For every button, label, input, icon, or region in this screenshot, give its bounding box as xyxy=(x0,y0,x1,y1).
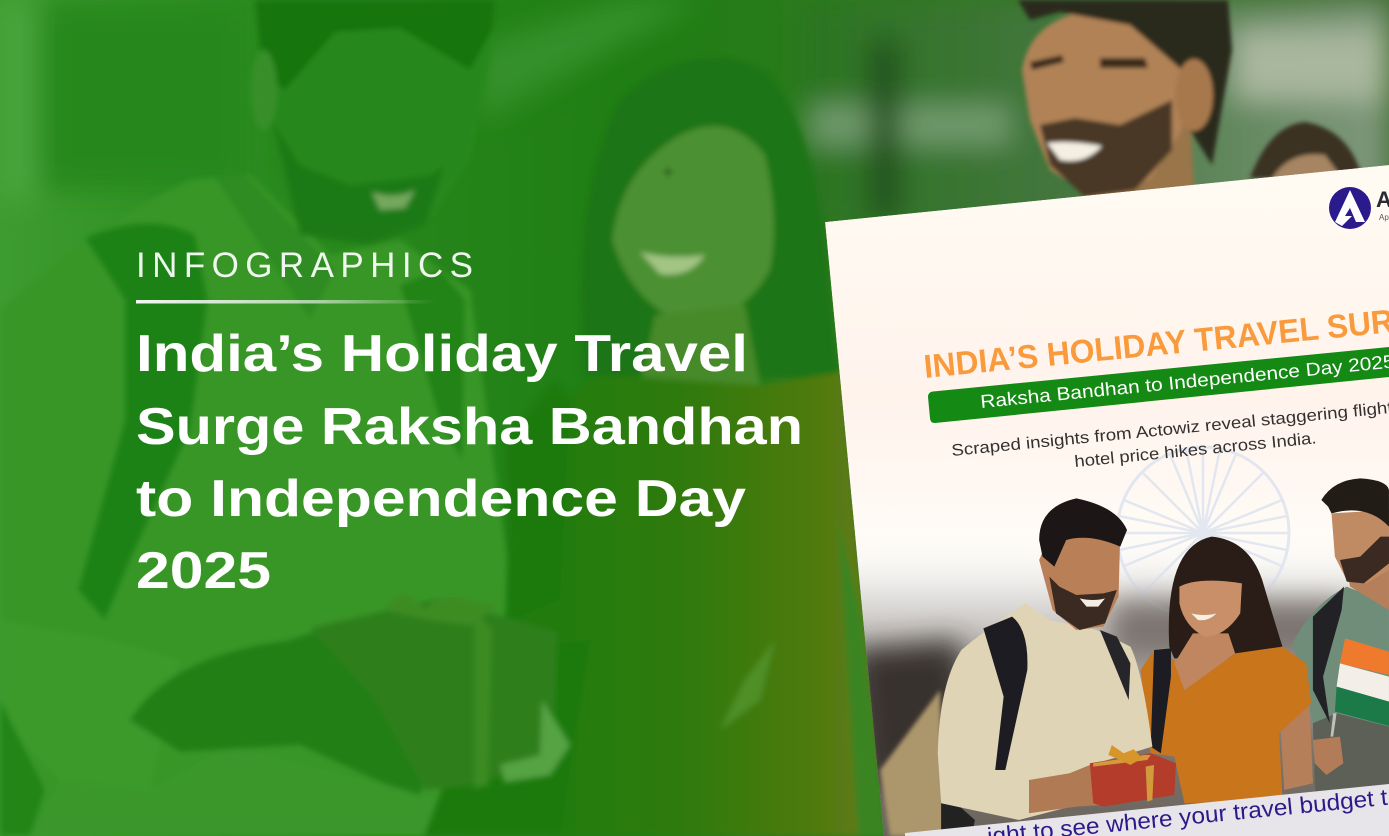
photo: man behind card, top right xyxy=(1018,0,1362,210)
label: INFOGRAPHICS: INFOGRAPHICS xyxy=(136,246,473,285)
station blur shapes xyxy=(850,600,1350,790)
woman face xyxy=(612,126,774,322)
card description: Scraped insights from Actowiz reveal staggering flight xyxy=(951,399,1389,460)
station backdrop xyxy=(855,536,1356,836)
platform floor xyxy=(880,690,945,836)
logo: Ap xyxy=(1379,213,1389,222)
photo: travellers xyxy=(938,478,1389,836)
man head xyxy=(262,0,495,245)
card subtitle banner xyxy=(928,347,1389,423)
person: right man with flag xyxy=(1292,478,1389,792)
card description: hotel price hikes across India. xyxy=(1074,429,1317,471)
icon: ashoka chakra watermark xyxy=(1117,447,1289,619)
underline rule xyxy=(136,300,436,304)
man collar xyxy=(215,175,335,320)
main heading: India’s Holiday Travel xyxy=(136,325,748,383)
infographic preview card xyxy=(825,165,1389,836)
main heading xyxy=(136,325,803,600)
hand xyxy=(130,630,428,795)
card sheet xyxy=(825,165,1389,836)
main heading: Surge Raksha Bandhan xyxy=(136,398,803,456)
background photo: blurred station top right xyxy=(0,0,1389,230)
main heading: 2025 xyxy=(136,542,271,600)
photo: man with gift in green overlay xyxy=(0,0,885,836)
backpack strap xyxy=(78,223,208,620)
gift box xyxy=(1090,745,1176,807)
main heading: to Independence Day xyxy=(136,470,746,528)
person: woman in orange saree xyxy=(1141,537,1313,803)
gift box xyxy=(310,598,557,790)
woman hair xyxy=(582,58,838,378)
logo xyxy=(1329,187,1389,229)
arm and cuff xyxy=(0,620,180,790)
card subtitle banner: Raksha Bandhan to Independence Day 2025 xyxy=(979,350,1389,412)
man shirt xyxy=(0,175,560,836)
person: man in cream kurta xyxy=(938,498,1176,836)
saree xyxy=(424,372,885,836)
